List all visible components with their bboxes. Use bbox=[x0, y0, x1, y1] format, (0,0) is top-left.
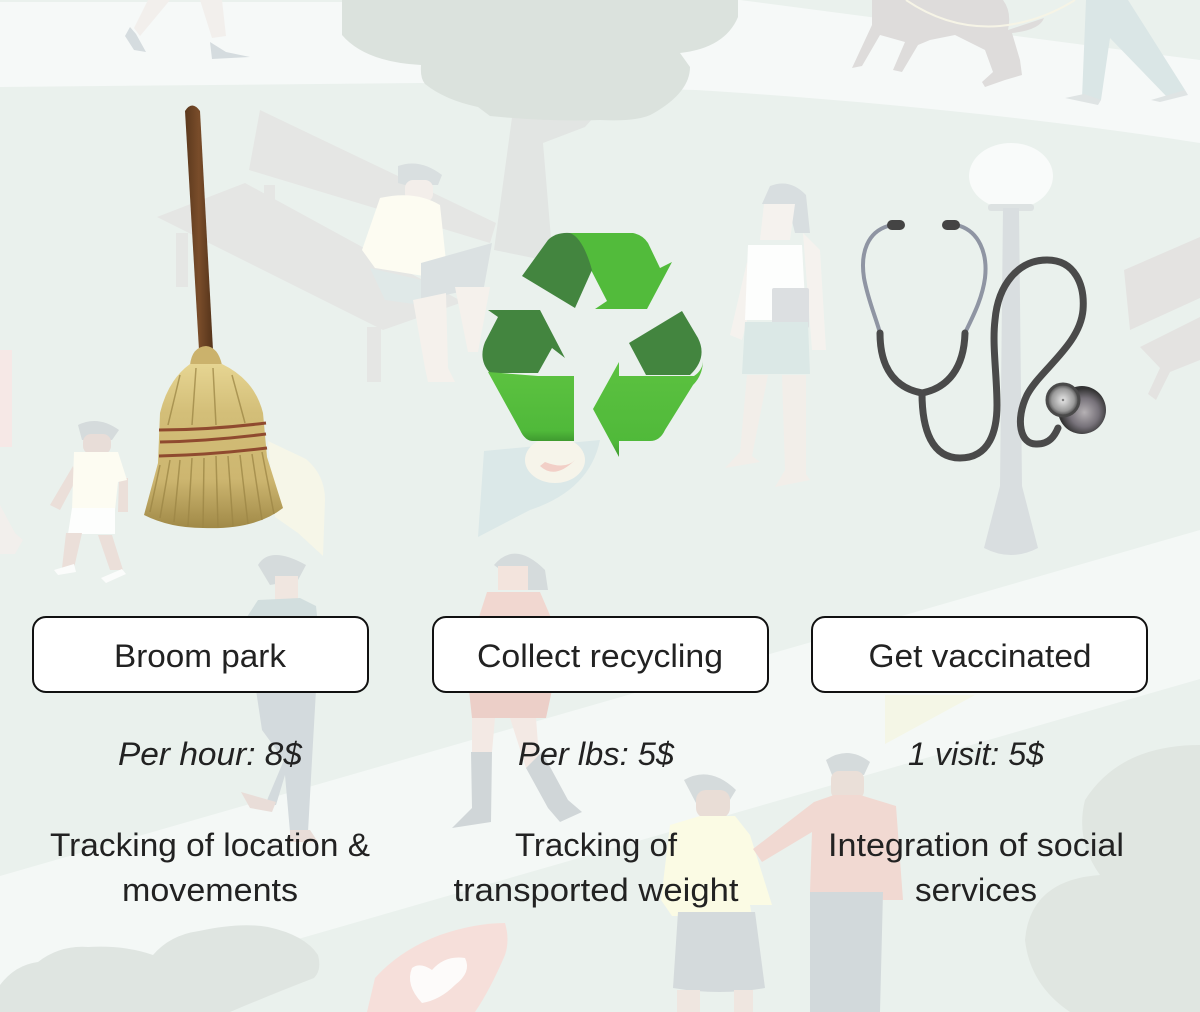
description: social services: Integration of social bbox=[828, 827, 1124, 863]
woman with glasses bbox=[684, 774, 736, 803]
tree bbox=[494, 110, 600, 262]
right bench bbox=[1124, 237, 1200, 400]
lower path bbox=[0, 530, 1200, 1012]
description: location tracking: movements bbox=[122, 872, 298, 908]
recycling arrow: left bbox=[482, 310, 574, 441]
description: weight tracking bbox=[454, 827, 739, 908]
walker with teal trousers bbox=[1082, 0, 1185, 100]
description: location tracking: Tracking of location & bbox=[50, 827, 370, 863]
left shrub bbox=[0, 925, 319, 1012]
heart bubble bbox=[367, 923, 508, 1012]
woman with ponytail bbox=[258, 555, 306, 585]
label: Get vaccinated: Get vaccinated bbox=[868, 638, 1092, 674]
walker heels bbox=[134, 0, 226, 38]
heart bbox=[410, 958, 467, 1003]
seated man bbox=[398, 163, 442, 185]
yellow bubble behind broom bbox=[268, 441, 325, 556]
price: per visit: 1 visit: 5$ bbox=[908, 736, 1045, 772]
recycling arrow: right bbox=[593, 311, 703, 457]
label: Collect recycling bbox=[433, 617, 768, 692]
woman with bag bbox=[762, 183, 810, 233]
yellow triangle bbox=[885, 695, 975, 744]
man in sweater bbox=[826, 753, 870, 775]
pink arm left edge bbox=[0, 350, 12, 447]
description: weight tracking: transported weight bbox=[454, 872, 739, 908]
blue bubble with emoji bbox=[478, 440, 600, 537]
description: location tracking bbox=[50, 827, 370, 908]
price: per lbs: Per lbs: 5$ bbox=[518, 736, 675, 772]
dog bbox=[852, 0, 1044, 87]
right shrub bbox=[1025, 745, 1200, 1012]
label: Broom park: Broom park bbox=[114, 638, 287, 674]
description: weight tracking: Tracking of bbox=[515, 827, 677, 863]
upper path bbox=[0, 2, 420, 87]
description: social services bbox=[828, 827, 1124, 908]
description: social services: services bbox=[915, 872, 1037, 908]
icon: recycling symbol bbox=[482, 233, 703, 457]
child bbox=[78, 421, 119, 440]
left bench bbox=[157, 110, 496, 382]
icon: broom bbox=[144, 106, 283, 528]
lamp post bbox=[969, 143, 1053, 209]
label: Get vaccinated bbox=[812, 617, 1147, 692]
label: Collect recycling: Collect recycling bbox=[477, 638, 723, 674]
recycling arrow: top bbox=[522, 233, 672, 309]
leash bbox=[906, 0, 1075, 26]
woman in red bbox=[494, 554, 548, 590]
icon: stethoscope bbox=[863, 220, 1106, 458]
label: Broom park bbox=[33, 617, 368, 692]
price: per hour: Per hour: 8$ bbox=[118, 736, 303, 772]
